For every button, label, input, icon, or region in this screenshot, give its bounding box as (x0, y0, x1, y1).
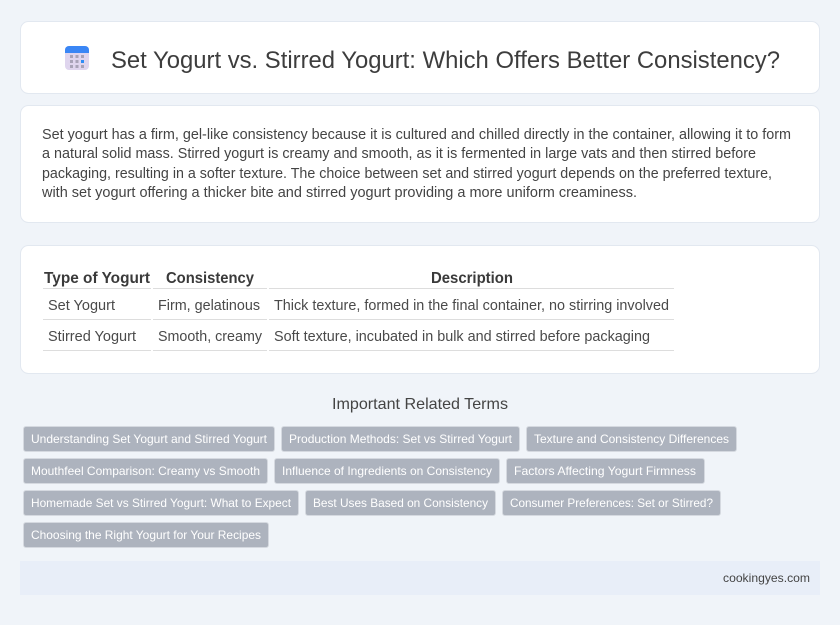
panel: title (20, 22, 820, 94)
table row: stirred yogurt: Stirred Yogurt (48, 329, 136, 345)
tag: Production Methods: Set vs Stirred Yogurt (289, 432, 513, 446)
tag: Factors Affecting Yogurt Firmness (514, 464, 696, 478)
tag: Texture and Consistency Differences (534, 432, 729, 446)
tag: Best Uses Based on Consistency (313, 496, 488, 510)
tag: Choosing the Right Yogurt for Your Recipes (31, 528, 261, 542)
tag (274, 458, 500, 484)
tag (526, 426, 736, 452)
tag (502, 490, 720, 516)
tag: Homemade Set vs Stirred Yogurt: What to Expect (31, 496, 292, 510)
tag (24, 426, 274, 452)
related terms tags (24, 426, 736, 548)
tag (306, 490, 496, 516)
heading: related terms: Important Related Terms (332, 396, 508, 413)
panel: summary paragraph (20, 106, 820, 222)
tag (506, 458, 704, 484)
tag: Understanding Set Yogurt and Stirred Yogurt (31, 432, 268, 446)
table header: Consistency (166, 270, 254, 287)
tag: Mouthfeel Comparison: Creamy vs Smooth (31, 464, 260, 478)
title text: Set Yogurt vs. Stirred Yogurt: Which Offers Better Consistency? (111, 47, 780, 74)
table header: Description (431, 270, 513, 287)
tag (24, 490, 298, 516)
panel: summary paragraph: packaging, resulting in a softer texture. The choice between set and stirred yogurt depends on the preferred texture, (42, 166, 772, 182)
table header: Type of Yogurt (44, 270, 150, 287)
table row: set yogurt (48, 298, 669, 314)
panel: summary paragraph: a natural solid mass. Stirred yogurt is creamy and smooth, as it is fermented in large vats and then stirred before (42, 146, 756, 162)
footer: cookingyes.com (723, 571, 810, 585)
tag: Consumer Preferences: Set or Stirred? (510, 496, 713, 510)
table row: set yogurt: Firm, gelatinous (158, 298, 260, 314)
table row: set yogurt: Thick texture, formed in the final container, no stirring involved (274, 298, 669, 314)
tag (24, 458, 268, 484)
tag (282, 426, 520, 452)
panel: summary paragraph: with set yogurt offering a thicker bite and stirred yogurt providing a more uniform creaminess. (41, 185, 637, 201)
table row: stirred yogurt (48, 329, 650, 345)
panel: comparison table (20, 246, 820, 374)
icon: calendar (65, 46, 89, 70)
footer (20, 561, 820, 595)
tag (24, 522, 268, 548)
table row: stirred yogurt: Smooth, creamy (158, 329, 263, 345)
table row: stirred yogurt: Soft texture, incubated in bulk and stirred before packaging (274, 329, 650, 345)
panel: summary paragraph: Set yogurt has a firm, gel-like consistency because it is cultured and chilled directly in the container, allowing it to form (42, 127, 791, 143)
tag: Influence of Ingredients on Consistency (282, 464, 492, 478)
table header (44, 270, 513, 287)
table row: set yogurt: Set Yogurt (48, 298, 115, 314)
